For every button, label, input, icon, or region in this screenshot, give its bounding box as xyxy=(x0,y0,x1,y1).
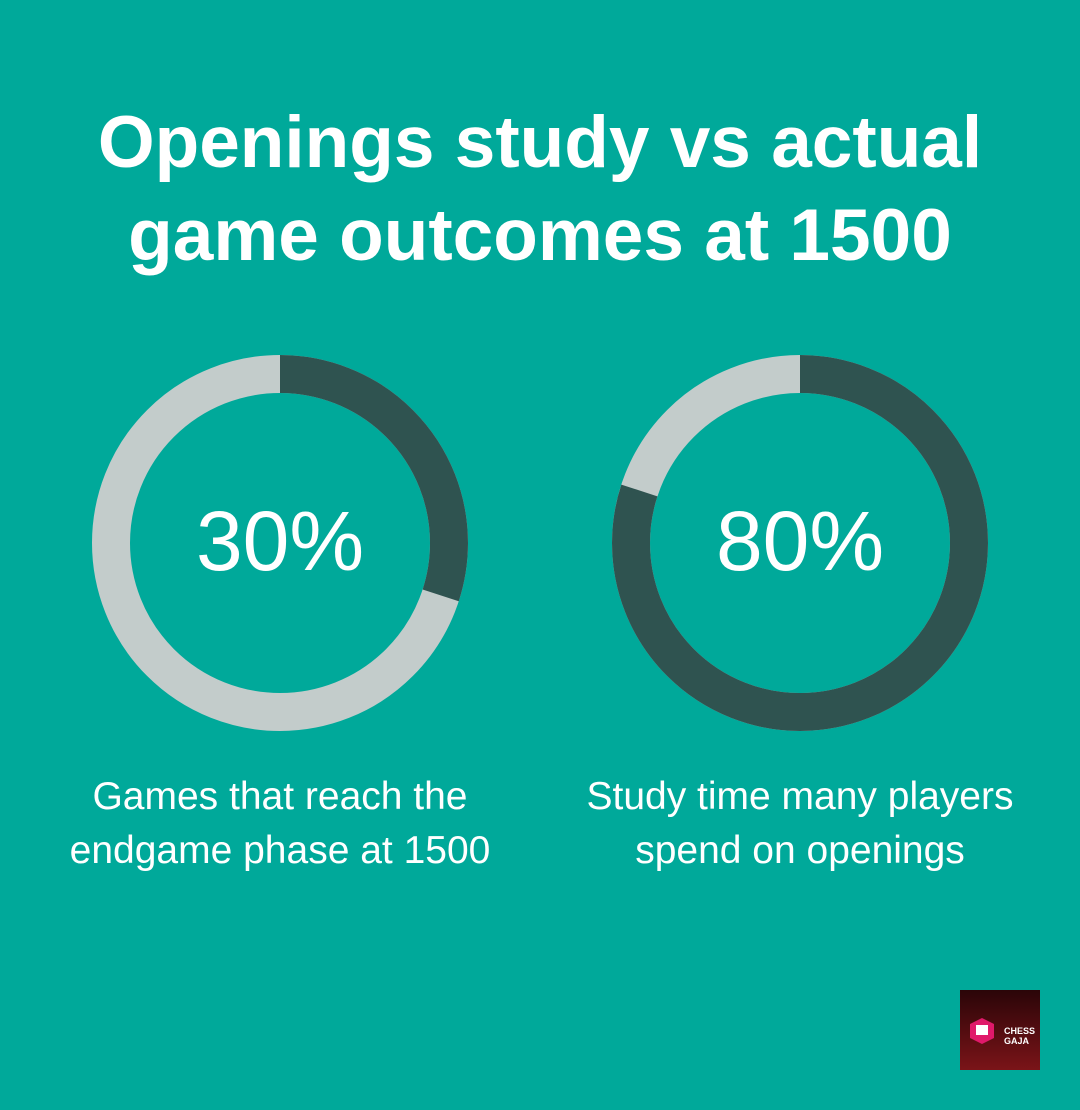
label: left xyxy=(70,775,490,872)
logo: CHESS xyxy=(1004,1026,1035,1036)
label: right xyxy=(586,775,1014,872)
donut: 30%: 30% xyxy=(196,494,364,588)
label: left: Games that reach the xyxy=(92,775,468,818)
logo: GAJA xyxy=(1004,1036,1030,1046)
donut: 80%: 80% xyxy=(716,494,884,588)
title xyxy=(98,102,982,276)
donut: 30% xyxy=(111,374,449,712)
label: right: spend on openings xyxy=(635,829,965,872)
title: Openings study vs actual xyxy=(98,102,982,183)
title: game outcomes at 1500 xyxy=(128,195,952,276)
donut: 80% xyxy=(631,374,969,712)
label: right: Study time many players xyxy=(586,775,1014,818)
label: left: endgame phase at 1500 xyxy=(70,829,490,872)
logo xyxy=(960,990,1040,1070)
